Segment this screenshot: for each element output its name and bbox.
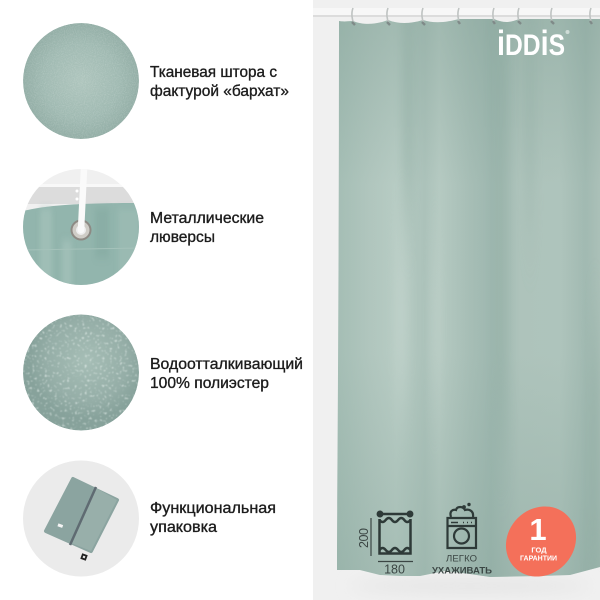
text: packaging: упаковка	[150, 519, 217, 536]
text: packaging: Функциональная	[150, 500, 276, 517]
text: velvet texture	[150, 64, 289, 100]
curtain fabric	[330, 0, 600, 600]
panel: metal grommets feature	[23, 169, 264, 290]
icon: easy care washing machine	[432, 504, 492, 576]
width value: 180	[384, 562, 405, 576]
badge: 1 year warranty: ГАРАНТИИ	[520, 554, 557, 562]
badge: 1 year warranty: 1	[529, 512, 547, 547]
text: water repellent: Водоотталкивающий	[150, 356, 303, 373]
height value: 200	[357, 528, 371, 548]
caption: easy care: УХАЖИВАТЬ	[432, 566, 492, 576]
floor shadow	[350, 581, 590, 591]
panel: velvet texture feature	[23, 23, 289, 139]
curtain size icon	[378, 512, 412, 554]
curtain rod	[313, 8, 600, 17]
panel background	[313, 0, 600, 600]
caption: easy care: ЛЕГКО	[446, 554, 477, 564]
badge: 1 year warranty	[492, 492, 590, 591]
badge: 1 year warranty: ГОД	[531, 546, 547, 554]
height line	[370, 518, 372, 556]
photo: grommet	[23, 169, 139, 290]
photo: water droplets	[23, 314, 139, 431]
photo: zip bag	[23, 460, 139, 576]
washing machine icon	[448, 504, 476, 548]
logo: iddis: iDDiS	[497, 24, 565, 63]
text: velvet texture: Тканевая штора с	[150, 64, 277, 81]
width line	[378, 560, 413, 562]
photo: velvet fabric	[23, 23, 139, 139]
text: metal grommets: люверсы	[150, 229, 215, 246]
text: packaging	[150, 500, 276, 536]
icon: size dimensions 200 x 180	[357, 512, 413, 576]
panel: curtain photo	[313, 0, 600, 600]
text: metal grommets: Металлические	[150, 210, 264, 227]
panel: water repellent feature	[23, 314, 303, 431]
text: water repellent	[150, 356, 303, 392]
caption: easy care	[432, 554, 492, 576]
text: water repellent: 100% полиэстер	[150, 375, 269, 392]
text: velvet texture: фактурой «бархат»	[150, 83, 289, 100]
text: metal grommets	[150, 210, 264, 246]
panel: packaging feature	[23, 460, 276, 576]
curtain hooks	[352, 8, 592, 25]
